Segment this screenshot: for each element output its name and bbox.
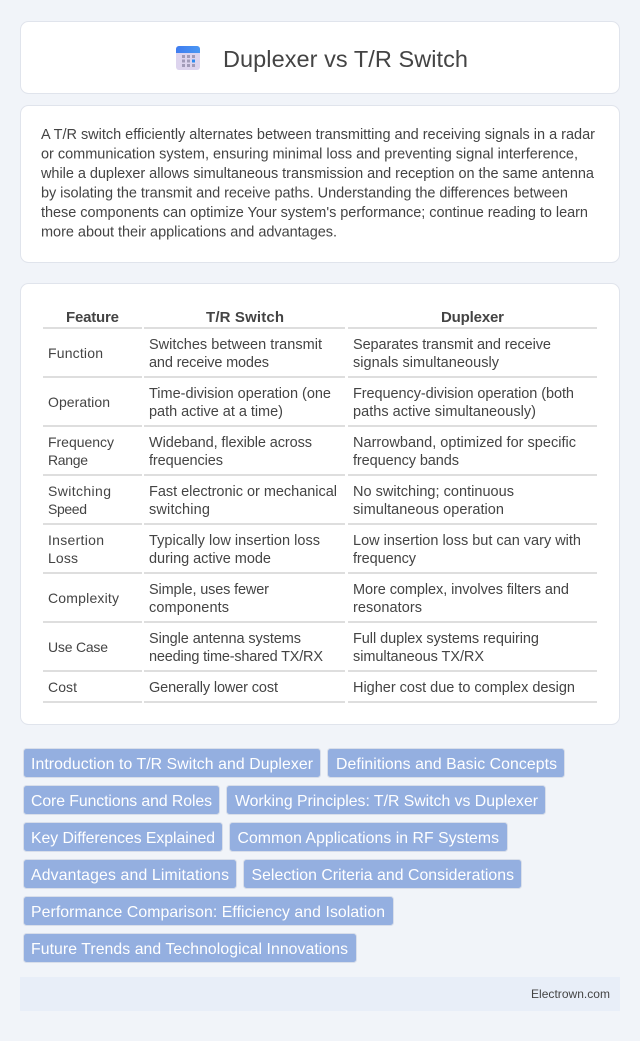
row: Function	[48, 337, 551, 371]
footer bar	[20, 977, 620, 1011]
topic tags	[24, 748, 564, 962]
row: Function: Switches between transmit	[149, 337, 322, 353]
row: Frequency Range: Narrowband, optimized for specific	[353, 435, 576, 451]
intro paragraph: by isolating the transmit and receive paths. Understanding the differences between	[41, 186, 568, 202]
tag: common applications: Common Applications in RF Systems	[238, 830, 499, 847]
tag: performance comparison: Performance Comparison: Efficiency and Isolation	[31, 904, 385, 921]
row: Function: and receive modes	[149, 355, 269, 371]
intro paragraph: while a duplexer allows simultaneous transmission and reception on the same antenna	[40, 166, 595, 182]
row: Frequency Range	[48, 434, 576, 469]
row: Cost: Generally lower cost	[149, 680, 278, 696]
tag: core functions: Core Functions and Roles	[31, 793, 212, 810]
row: Use Case	[48, 631, 539, 665]
intro paragraph: these components can optimize Your system's performance; continue reading to learn	[41, 205, 588, 221]
row: Cost	[48, 679, 575, 696]
table header: Duplexer	[441, 309, 504, 326]
row: Insertion Loss: Low insertion loss but can vary with	[353, 533, 581, 549]
intro paragraph: or communication system, ensuring minimal loss and preventing signal interference,	[41, 146, 578, 162]
row: Switching Speed: switching	[149, 502, 210, 518]
tag: selection criteria	[244, 860, 522, 888]
row: Frequency Range: Frequency	[48, 434, 114, 450]
row: Complexity: Simple, uses fewer	[149, 582, 269, 598]
row: Switching Speed: simultaneous operation	[353, 502, 504, 518]
row: Operation: Frequency-division operation (both	[353, 386, 574, 402]
row: Complexity: Complexity	[48, 590, 119, 606]
row: Switching Speed: Fast electronic or mechanical	[149, 484, 337, 500]
icon: calendar	[176, 46, 200, 70]
row: Insertion Loss: Typically low insertion loss	[149, 533, 320, 549]
tag: introduction: Introduction to T/R Switch and Duplexer	[31, 756, 313, 773]
table header: T/R Switch	[206, 309, 284, 326]
row: Frequency Range: frequencies	[149, 453, 223, 469]
tag: key differences: Key Differences Explained	[31, 830, 215, 847]
intro text panel	[20, 106, 620, 262]
row: Operation: Time-division operation (one	[149, 386, 331, 402]
header panel	[20, 22, 620, 94]
table header: Feature	[66, 309, 119, 326]
title: Duplexer vs T/R Switch	[223, 46, 468, 72]
tag: core functions	[24, 786, 220, 814]
row: Cost: Cost	[48, 679, 77, 695]
footer credit: Electrown.com	[531, 987, 610, 1001]
tag: definitions: Definitions and Basic Concepts	[336, 756, 557, 773]
row: Complexity: resonators	[353, 600, 422, 616]
row: Operation	[48, 386, 574, 420]
tag: performance comparison	[24, 896, 394, 926]
row: Insertion Loss: Insertion	[48, 532, 104, 548]
table header	[66, 309, 504, 326]
tag: selection criteria: Selection Criteria and Considerations	[252, 867, 514, 884]
row: Frequency Range: Wideband, flexible across	[149, 435, 312, 451]
row: Switching Speed: No switching; continuous	[353, 484, 514, 500]
row: Use Case: Full duplex systems requiring	[353, 631, 539, 647]
row: Operation: Operation	[48, 394, 110, 410]
tag: future trends: Future Trends and Technological Innovations	[31, 941, 348, 958]
comparison table panel	[20, 284, 620, 724]
row: Function: Function	[48, 345, 103, 361]
row: Complexity: More complex, involves filters and	[353, 582, 569, 598]
row: Switching Speed	[48, 483, 514, 518]
row: Use Case: simultaneous TX/RX	[353, 649, 484, 665]
row: Insertion Loss: during active mode	[149, 551, 271, 567]
tag: introduction	[24, 748, 320, 778]
row: Use Case: needing time-shared TX/RX	[149, 649, 323, 665]
tag: future trends	[24, 934, 356, 962]
intro paragraph: more about their applications and advantages.	[41, 224, 337, 240]
row: Use Case: Single antenna systems	[149, 631, 301, 647]
row: Switching Speed: Speed	[48, 501, 87, 517]
tag: advantages: Advantages and Limitations	[31, 867, 229, 884]
row: Function: signals simultaneously	[353, 355, 500, 371]
row: Cost: Higher cost due to complex design	[353, 680, 575, 696]
row: Switching Speed: Switching	[48, 483, 111, 499]
row: Use Case: Use Case	[48, 639, 108, 655]
row: Complexity: components	[149, 600, 229, 616]
row: Operation: paths active simultaneously)	[353, 404, 536, 420]
row: Insertion Loss: frequency	[353, 551, 417, 567]
tag: working principles: Working Principles: T/R Switch vs Duplexer	[235, 793, 538, 810]
tag: common applications	[230, 822, 508, 852]
row: Function: Separates transmit and receive	[353, 337, 551, 353]
row: Frequency Range: frequency bands	[353, 453, 459, 469]
row: Frequency Range: Range	[48, 452, 88, 468]
row: Insertion Loss	[48, 532, 581, 567]
tag: definitions	[328, 748, 564, 778]
tag: key differences	[24, 822, 222, 852]
intro paragraph: A T/R switch efficiently alternates between transmitting and receiving signals in a radar	[41, 127, 595, 143]
tag: advantages	[24, 860, 236, 888]
row: Complexity	[48, 582, 569, 616]
row: Insertion Loss: Loss	[48, 550, 78, 566]
row: Operation: path active at a time)	[149, 404, 283, 420]
tag: working principles	[226, 786, 546, 814]
intro paragraph	[40, 127, 595, 240]
